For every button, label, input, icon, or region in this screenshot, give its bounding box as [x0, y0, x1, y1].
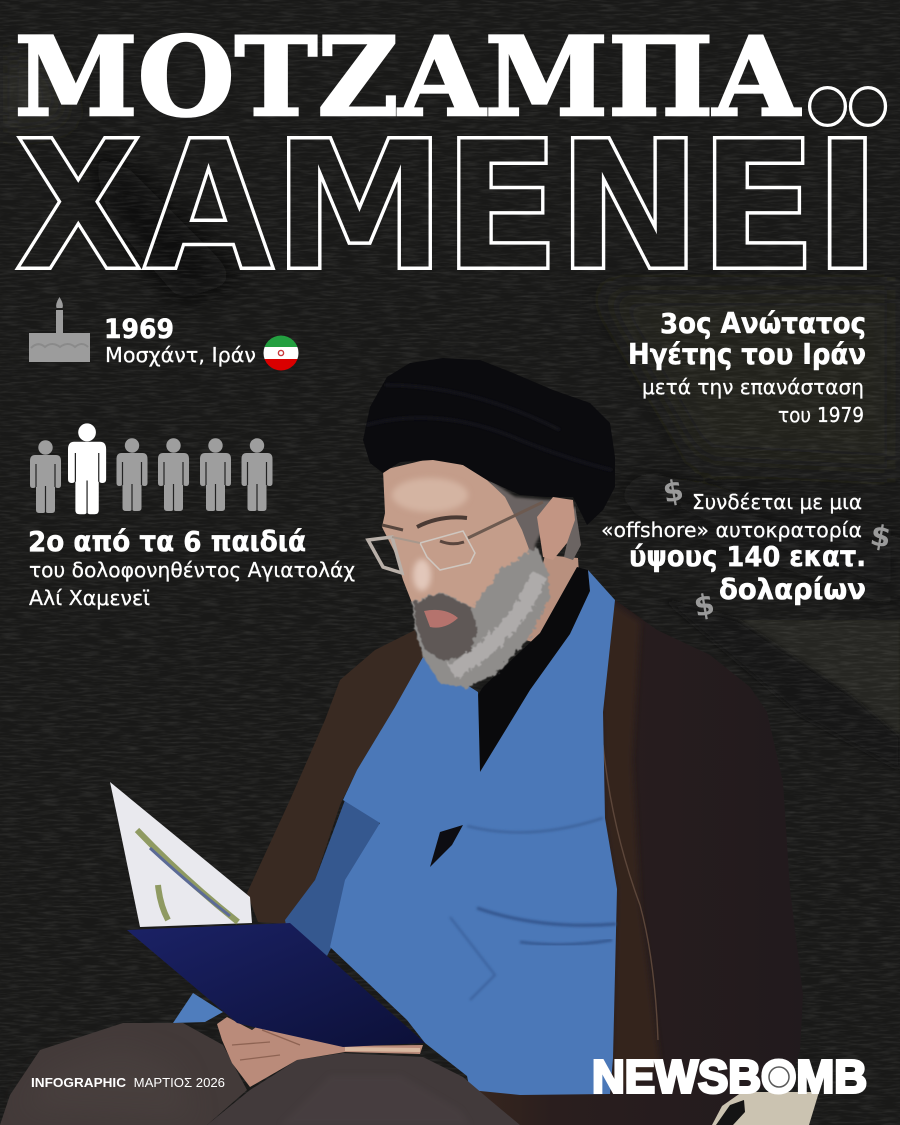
text block: offshore empire: δολαρίων	[719, 573, 866, 606]
turban	[363, 358, 615, 525]
icon: six children row	[30, 423, 272, 514]
hair	[487, 478, 560, 590]
birth year and place: Μοσχάντ, Ιράν	[105, 343, 256, 367]
text block: second of six children: 2ο από τα 6 παιδιά	[28, 525, 306, 558]
legs	[0, 1023, 520, 1125]
text block: second of six children: Αλί Χαμενεϊ	[29, 586, 150, 610]
text block: third supreme leader: 3ος Ανώτατος	[660, 307, 866, 340]
icon: dollar signs: $	[660, 473, 686, 510]
text block: second of six children: του δολοφονηθέντος Αγιατολάχ	[29, 558, 355, 582]
footer credit: INFOGRAPHIC	[31, 1076, 126, 1090]
title: surname outlined: Ε	[443, 103, 560, 311]
ear	[537, 497, 575, 560]
text block: third supreme leader: Ηγέτης του Ιράν	[628, 338, 866, 371]
icon: dollar signs: $	[868, 518, 894, 555]
cloak right shoulder and arm	[470, 600, 803, 1125]
title: diaeresis rings	[810, 88, 886, 125]
text block: offshore empire: ύψους 140 εκατ.	[629, 540, 866, 573]
text block: offshore empire: Συνδέεται με μια	[692, 490, 862, 514]
beard	[412, 547, 550, 688]
birth year and place: 1969	[104, 314, 174, 345]
hands	[217, 1017, 423, 1087]
title: surname outlined: Ι	[812, 103, 882, 311]
birth year and place	[104, 314, 256, 367]
text block: third supreme leader	[628, 307, 866, 427]
footer credit: ΜΑΡΤΙΟΣ 2026	[130, 1076, 225, 1090]
blue robe	[173, 570, 617, 1095]
title: surname outlined: Μ	[273, 103, 446, 311]
title: surname outlined: Α	[143, 103, 274, 311]
title: surname outlined: Ν	[557, 103, 702, 311]
photo: cleric reading a book	[0, 358, 819, 1125]
logo: Newsbomb: NEWSBOMB	[592, 1050, 867, 1102]
face highlights	[382, 478, 468, 591]
black under-collar	[478, 567, 590, 772]
title: surname outlined: Ε	[699, 103, 817, 311]
text block: offshore empire: «offshore» αυτοκρατορία	[601, 518, 862, 542]
icon: birthday cake	[29, 297, 90, 362]
icon: dollar signs: $	[691, 587, 717, 624]
text block: third supreme leader: μετά την επανάσταση	[642, 375, 864, 399]
neck	[525, 555, 580, 645]
title: first name: ΜΟΤΖΑΜΠΑ	[14, 13, 801, 141]
text block: offshore empire	[601, 490, 866, 606]
text block: second of six children	[28, 525, 355, 610]
title: surname outlined: Χ	[14, 103, 142, 311]
cloak left shoulder	[247, 630, 425, 925]
icon: Iran flag	[263, 335, 299, 371]
text block: third supreme leader: του 1979	[778, 403, 864, 427]
book	[110, 782, 425, 1047]
icon: dollar signs	[660, 473, 894, 624]
face	[382, 458, 533, 640]
torn paper scrap	[712, 1092, 819, 1125]
blue inner shirt	[285, 800, 380, 970]
glasses	[368, 502, 543, 573]
